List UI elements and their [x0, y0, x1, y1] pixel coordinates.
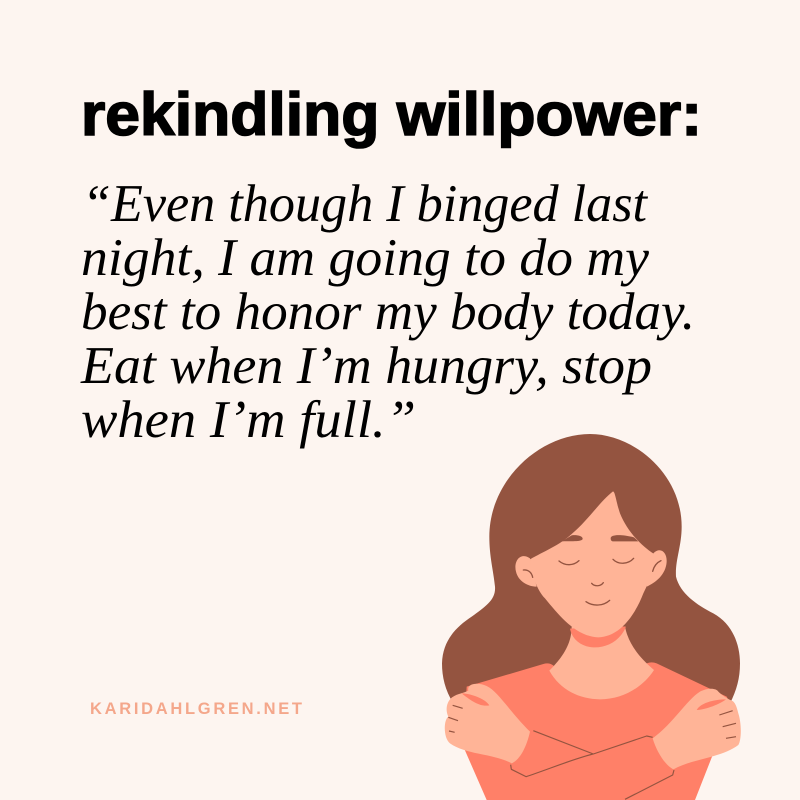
quote text block: Eat when I’m hungry, stop [80, 337, 652, 395]
ears [515, 550, 667, 587]
right hand and forearm [653, 689, 741, 769]
neck [549, 627, 654, 699]
torso sweater [463, 662, 732, 800]
illustration: woman hugging herself [442, 434, 741, 800]
eyebrows [562, 535, 638, 541]
crossed sleeve lines [511, 731, 674, 799]
hair [442, 434, 740, 703]
quote text block: best to honor my body today. [81, 283, 695, 341]
title: rekindling willpower: [81, 81, 702, 148]
website credit: KARIDAHLGREN.NET [90, 700, 302, 718]
quote text block: night, I am going to do my [81, 229, 649, 287]
facial features [523, 558, 661, 605]
neck shadow [570, 627, 626, 647]
face [530, 492, 654, 637]
quote text block [80, 175, 695, 449]
left hand and forearm [445, 684, 530, 763]
quote text block: when I’m full.” [81, 391, 416, 449]
quote text block: “Even though I binged last [82, 175, 648, 233]
